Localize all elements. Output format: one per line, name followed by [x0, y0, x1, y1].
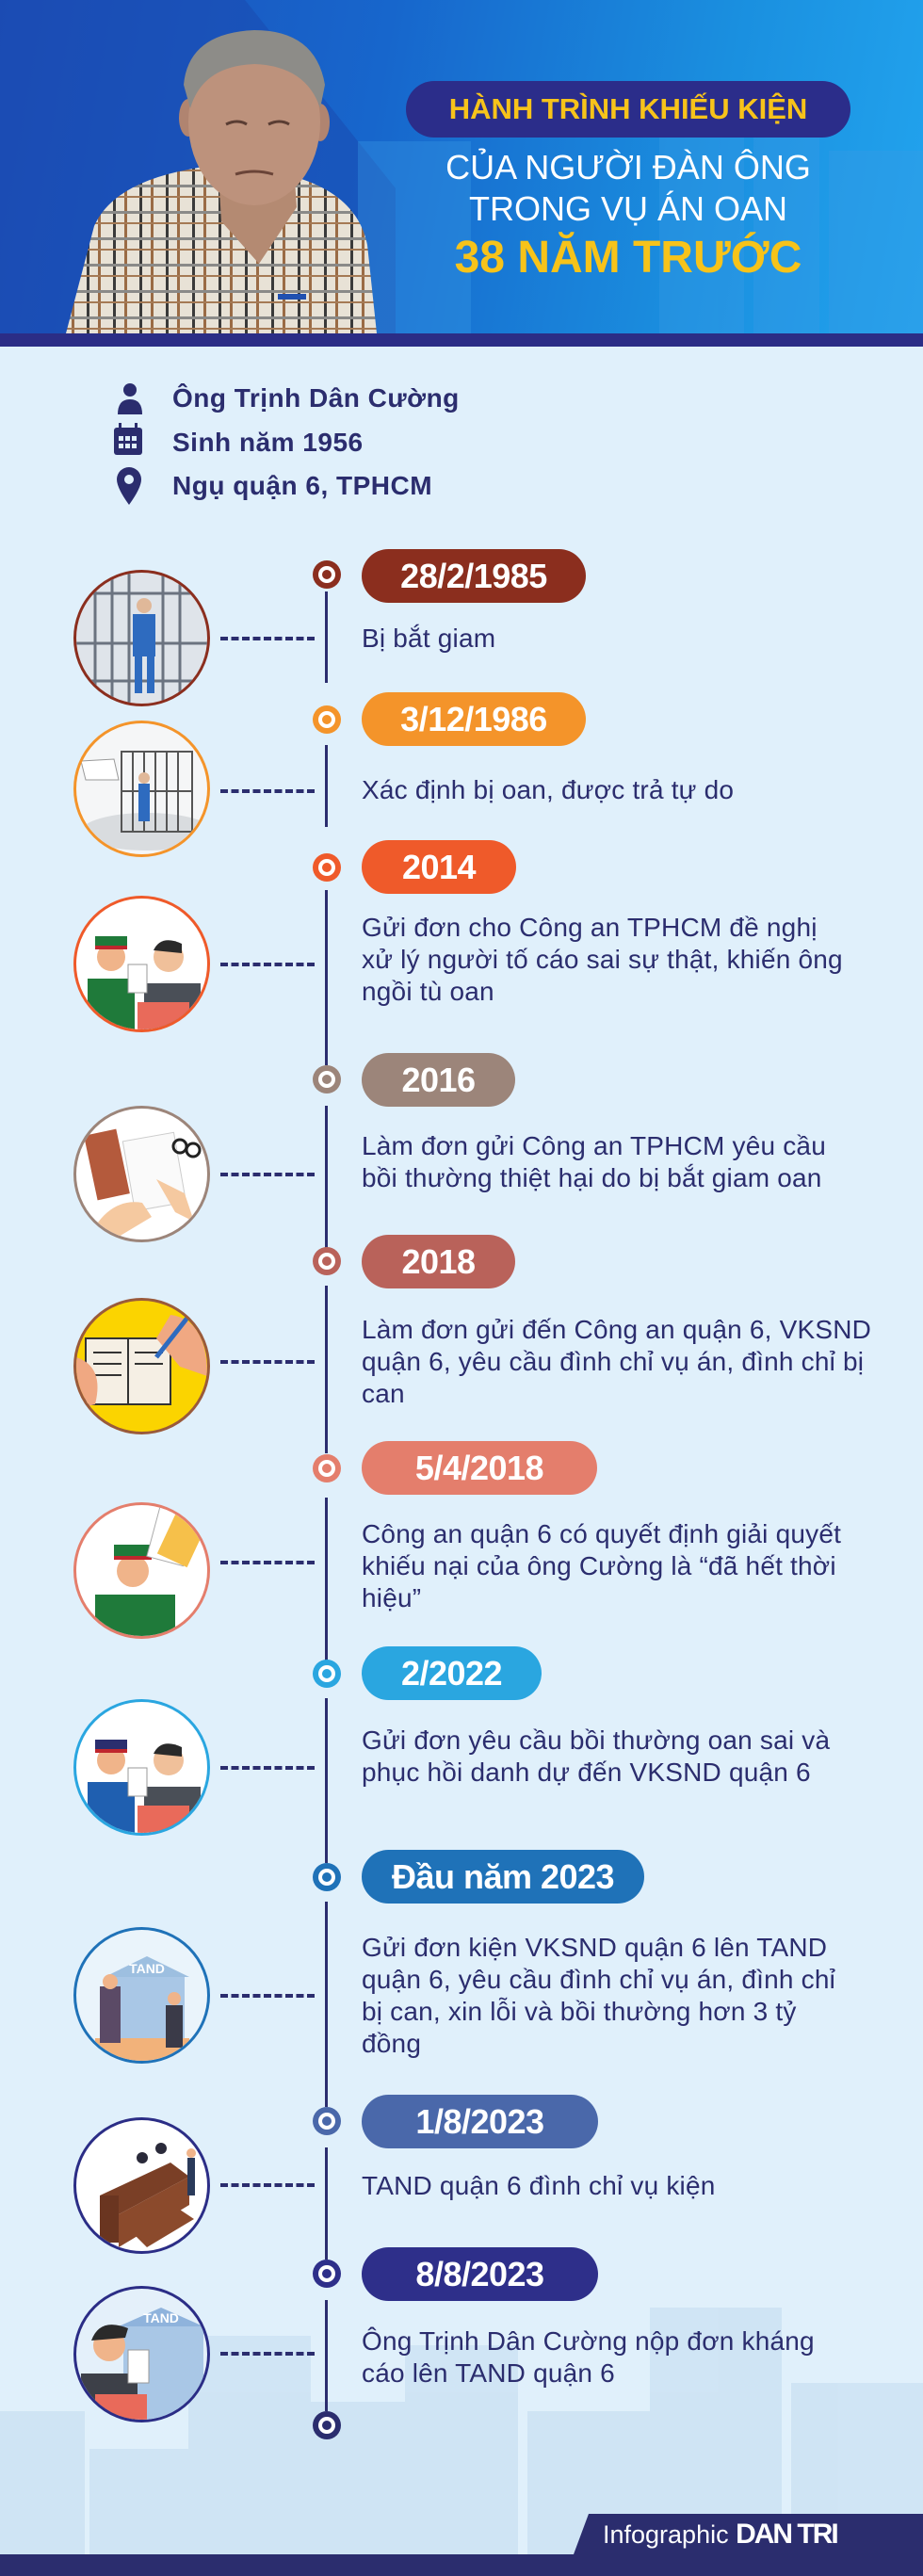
description: khiếu nại của ông Cường là “đã hết thời — [362, 1551, 836, 1580]
title pill — [406, 81, 850, 138]
description: Gửi đơn kiện VKSND quận 6 lên TAND — [362, 1933, 827, 1962]
subtitle highlight: 38 NĂM TRƯỚC — [455, 233, 802, 283]
date pill: 3/12/1986 — [400, 700, 547, 738]
date pill: 28/2/1985 — [400, 557, 547, 595]
date pill: 8/8/2023 — [415, 2255, 544, 2293]
connector — [220, 963, 315, 966]
description: Công an quận 6 có quyết định giải quyết — [362, 1519, 841, 1548]
connector — [220, 1994, 315, 1998]
event 6: 5/4/2018 — [73, 1441, 841, 1639]
description: Gửi đơn yêu cầu bồi thường oan sai và — [362, 1725, 830, 1755]
description — [362, 1933, 835, 2058]
date pill — [362, 1235, 515, 1288]
event 8: Đầu năm 2023 — [73, 1850, 835, 2064]
event 3: 2014 — [73, 840, 843, 1032]
icon: prosecutor and citizen — [73, 1699, 210, 1836]
description: quận 6, yêu cầu đình chỉ vụ án, đình chỉ bị — [362, 1347, 864, 1376]
icon: man with TAND — [73, 2286, 210, 2422]
event 7: 2/2022 — [73, 1646, 831, 1836]
title pill: HÀNH TRÌNH KHIẾU KIỆN — [449, 92, 807, 125]
timeline vertical line segments — [325, 591, 328, 683]
date pill: 2018 — [401, 1242, 476, 1281]
date pill — [362, 692, 586, 746]
description — [362, 1725, 831, 1787]
description — [362, 1131, 826, 1192]
date pill: Đầu năm 2023 — [392, 1857, 614, 1896]
description: xử lý người tố cáo sai sự thật, khiến ông — [362, 945, 843, 974]
description — [362, 2326, 815, 2388]
description: can — [362, 1379, 405, 1408]
info: name: Ông Trịnh Dân Cường — [172, 383, 460, 413]
date pill — [362, 1646, 542, 1700]
date pill: 2014 — [402, 848, 476, 886]
footer credit — [0, 2514, 923, 2576]
icon: open cage — [73, 721, 210, 857]
connector — [220, 789, 315, 793]
icon: person — [118, 383, 142, 414]
date pill: 2/2022 — [401, 1654, 502, 1693]
icon: notebook and pen — [73, 1298, 210, 1434]
description: Ông Trịnh Dân Cường nộp đơn kháng — [362, 2326, 815, 2356]
event 2: 3/12/1986 — [73, 692, 734, 857]
description: quận 6, yêu cầu đình chỉ vụ án, đình chỉ — [362, 1965, 835, 1994]
connector — [220, 637, 315, 640]
date pill — [362, 1850, 644, 1904]
event 5: 2018 — [73, 1235, 871, 1434]
description: Gửi đơn cho Công an TPHCM đề nghị — [362, 913, 818, 942]
date pill: 5/4/2018 — [415, 1449, 543, 1487]
date pill — [362, 840, 516, 894]
photo: man in plaid shirt — [66, 30, 377, 333]
dot — [313, 560, 341, 589]
description — [362, 1315, 871, 1408]
description: ngồi tù oan — [362, 977, 494, 1006]
connector — [220, 2352, 315, 2356]
info: birth: Sinh năm 1956 — [172, 428, 364, 457]
date pill — [362, 2095, 598, 2148]
icon: police officer and citizen — [73, 896, 210, 1032]
icon: location pin — [117, 467, 141, 505]
icon: courtroom — [73, 2117, 210, 2254]
date pill: 2016 — [401, 1061, 476, 1099]
credit text: Infographic DAN TRI — [603, 2519, 837, 2550]
connector — [220, 1561, 315, 1564]
connector — [220, 1360, 315, 1364]
icon: writing document — [73, 1106, 210, 1242]
timeline end dot — [313, 2411, 341, 2439]
icon: prison cell — [73, 570, 210, 706]
date pill — [362, 2247, 598, 2301]
subtitle: CỦA NGƯỜI ĐÀN ÔNG — [445, 148, 811, 186]
date pill: 1/8/2023 — [415, 2102, 544, 2141]
description: đồng — [362, 2029, 421, 2058]
connector — [220, 1173, 315, 1176]
description: Làm đơn gửi đến Công an quận 6, VKSND — [362, 1315, 871, 1344]
icon: officer with documents — [73, 1502, 210, 1639]
connector — [220, 2183, 315, 2187]
description: Bị bắt giam — [362, 624, 495, 653]
description: Xác định bị oan, được trả tự do — [362, 775, 734, 804]
description: Làm đơn gửi Công an TPHCM yêu cầu — [362, 1131, 826, 1160]
event 10: 8/8/2023 — [73, 2247, 815, 2422]
subtitle: TRONG VỤ ÁN OAN — [469, 189, 787, 228]
icon: court building: TAND — [129, 1961, 165, 1976]
background buildings — [0, 2308, 923, 2554]
description — [362, 1519, 841, 1612]
date pill — [362, 1053, 515, 1107]
info block — [114, 383, 142, 505]
icon: calendar — [114, 423, 142, 455]
description: bồi thường thiệt hại do bị bắt giam oan — [362, 1163, 822, 1192]
icon: man with TAND: TAND — [143, 2310, 179, 2325]
description: TAND quận 6 đình chỉ vụ kiện — [362, 2171, 716, 2200]
connector — [220, 1766, 315, 1770]
date pill — [362, 1441, 597, 1495]
description: cáo lên TAND quận 6 — [362, 2358, 615, 2388]
event 9: 1/8/2023 — [73, 2095, 716, 2254]
title block — [406, 81, 850, 283]
event 4: 2016 — [73, 1053, 826, 1242]
description: hiệu” — [362, 1583, 421, 1612]
description: bị can, xin lỗi và bồi thường hơn 3 tỷ — [362, 1997, 797, 2026]
event 1: 28/2/1985 — [73, 549, 586, 706]
description: phục hồi danh dự đến VKSND quận 6 — [362, 1758, 811, 1787]
date pill — [362, 549, 586, 603]
icon: court building — [73, 1927, 210, 2064]
header banner — [0, 0, 923, 347]
info: address: Ngụ quận 6, TPHCM — [172, 471, 432, 500]
subtitle — [445, 148, 811, 228]
description — [362, 913, 843, 1006]
